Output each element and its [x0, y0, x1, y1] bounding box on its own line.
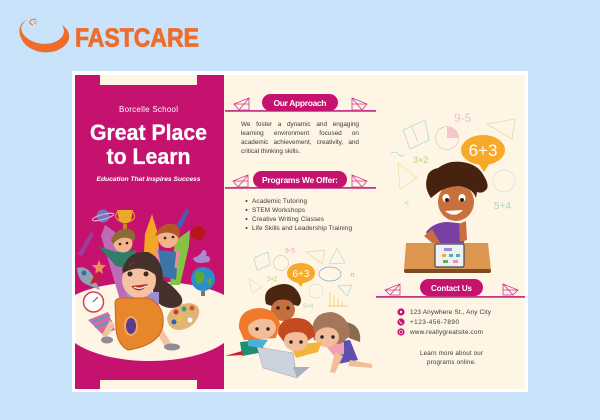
orange crayon [143, 214, 160, 270]
approach paragraph: critical thinking skills. [241, 148, 300, 155]
programs list [246, 198, 352, 232]
contact details: 123 Anywhere St., Any City [410, 309, 492, 316]
boy middle [278, 318, 322, 358]
programs list: Life Skills and Leadership Training [252, 225, 352, 232]
closing note [420, 350, 483, 366]
icon: phone [397, 318, 405, 326]
approach paragraph: academic achievement, creativity, and [241, 139, 359, 146]
girl dress [127, 292, 159, 306]
cover title: Great Place [90, 120, 207, 145]
green crayon [170, 230, 190, 285]
globe [191, 267, 215, 296]
boy hair [426, 162, 488, 198]
math labels [267, 248, 355, 310]
clock [84, 292, 104, 312]
palette [167, 303, 199, 330]
illustration: children with school supplies [77, 208, 215, 350]
icon: paper plane left [385, 284, 400, 295]
brochure sheet [72, 71, 528, 392]
section: programs header: Programs We Offer: [262, 175, 338, 185]
section: contact header [376, 279, 525, 298]
math labels: < [404, 198, 409, 208]
math doodles [391, 119, 515, 192]
girl face [122, 261, 157, 298]
approach paragraph: We foster a dynamic and engaging [241, 121, 359, 128]
boy right [155, 224, 180, 280]
section: our approach header [225, 94, 376, 112]
rocket [77, 267, 100, 290]
icon: paper plane left [233, 175, 248, 187]
math labels: 3×2 [267, 277, 278, 283]
math labels: 5+4 [494, 201, 511, 212]
math labels: 5+4 [303, 304, 314, 310]
pencil [78, 232, 94, 256]
icon: paper plane left [234, 98, 249, 110]
compass [176, 208, 189, 228]
icon: location [397, 308, 405, 316]
panel: left cover [75, 75, 224, 389]
boy shirt [426, 222, 466, 243]
letter D [115, 298, 163, 350]
closing note: programs online. [427, 359, 476, 366]
math labels: π [350, 272, 355, 279]
girl hair [122, 252, 182, 308]
math labels: 9-5 [454, 111, 472, 125]
school name: Borcelle School [119, 105, 178, 114]
tagline: Education That Inspires Success [96, 176, 201, 183]
icon: web [397, 328, 405, 336]
programs list: Academic Tutoring [252, 198, 307, 205]
contact details: www.reallygreatsite.com [409, 329, 483, 336]
math labels: 9-5 [285, 248, 295, 255]
laptop [257, 347, 310, 378]
speech bubble [287, 263, 315, 287]
star [92, 260, 106, 274]
illustration: boy with tablet [391, 111, 515, 273]
trophy [116, 210, 135, 229]
logo: FASTCARE [75, 22, 199, 52]
math labels: 3×2 [413, 155, 428, 165]
icon: paper plane right [503, 284, 518, 295]
purple crayon [101, 225, 134, 300]
programs list: Creative Writing Classes [252, 216, 324, 223]
approach paragraph: learning environment focused on [241, 130, 359, 137]
boy top [265, 284, 301, 321]
programs list: STEM Workshops [252, 207, 305, 214]
math labels [404, 111, 511, 212]
girl right [312, 312, 372, 373]
closing note: Learn more about our [420, 350, 483, 357]
section: contact header: Contact Us [431, 284, 473, 293]
girl left [225, 308, 280, 356]
contact details [397, 308, 492, 336]
icon: paper plane right [352, 175, 367, 187]
desk [404, 243, 491, 273]
contact details: +123-456-7890 [410, 319, 459, 326]
math doodles [249, 248, 352, 306]
apple [191, 226, 205, 240]
tablet [435, 244, 464, 267]
cover title [90, 120, 207, 169]
speech bubble: 6+3 [469, 141, 497, 160]
boy head [438, 183, 474, 221]
section: our approach header: Our Approach [274, 98, 326, 108]
planet [92, 210, 114, 222]
paint splat [193, 250, 210, 263]
illustration: kids at laptop [225, 248, 372, 378]
speech bubble: 6+3 [293, 269, 310, 280]
icon: paper plane right [352, 98, 367, 110]
girl legs [101, 320, 180, 350]
boy left [98, 229, 136, 270]
coloured pencils [88, 312, 115, 334]
cover title: to Learn [106, 144, 190, 169]
speech bubble [461, 135, 505, 172]
arm [424, 221, 467, 247]
section: programs header [225, 171, 376, 189]
approach paragraph [241, 121, 359, 155]
logo [19, 19, 199, 52]
